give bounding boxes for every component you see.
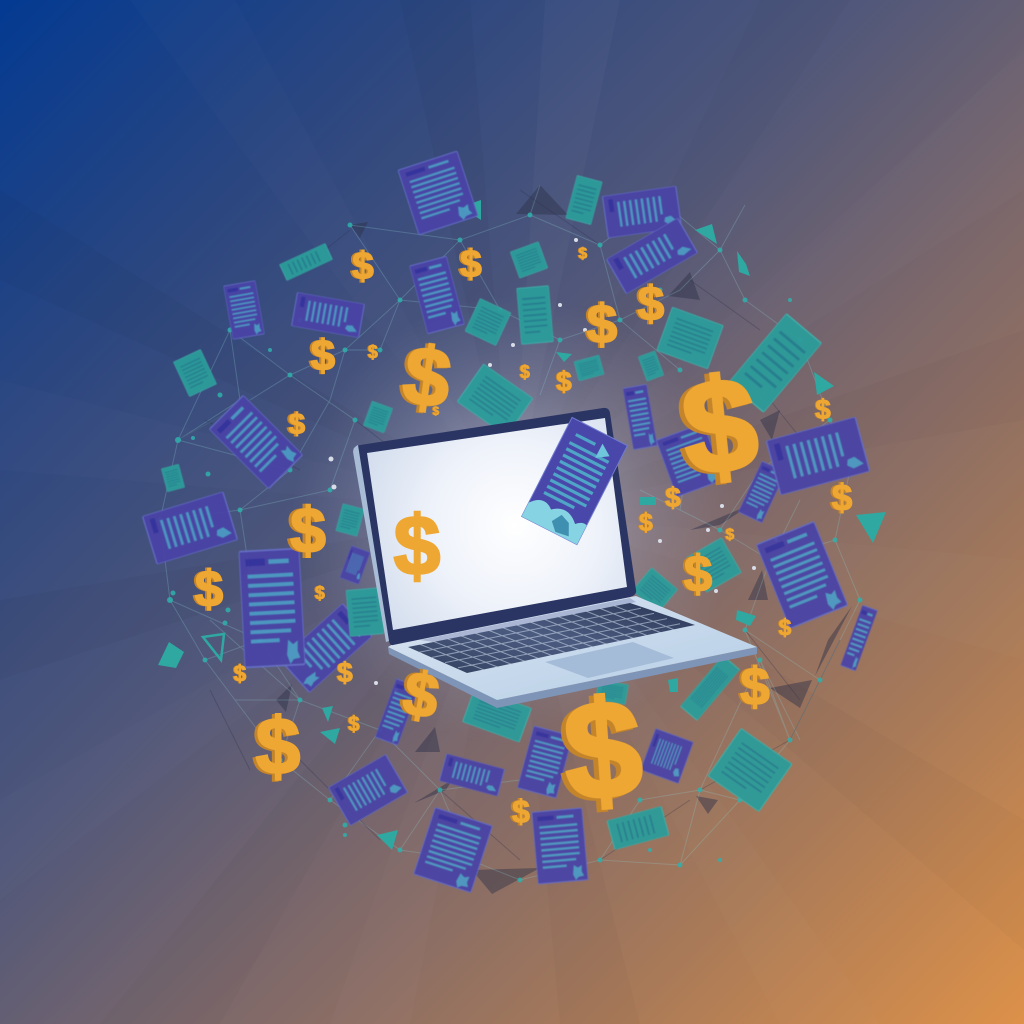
white network nodes xyxy=(328,238,778,692)
icon: dollar sign: $ xyxy=(348,713,360,736)
icon: dollar sign: $ xyxy=(398,328,456,426)
icon: purple document xyxy=(398,151,478,235)
dark network lines xyxy=(178,190,840,860)
icon: purple document xyxy=(239,549,305,667)
icon: dollar sign: $ xyxy=(587,293,617,355)
icon: purple document xyxy=(414,807,492,893)
icon: purple document xyxy=(641,728,693,784)
icon: purple document xyxy=(143,492,237,564)
icon: purple document xyxy=(209,395,303,489)
central glow xyxy=(280,290,750,750)
icon: dollar sign: $ xyxy=(556,366,572,397)
icon: dollar sign: $ xyxy=(639,508,653,536)
icon: purple document xyxy=(224,281,264,339)
icon: teal document xyxy=(336,504,364,536)
icon: purple document xyxy=(340,546,370,584)
icon: purple document xyxy=(756,522,848,628)
icon: teal document xyxy=(566,175,602,225)
icon: dollar sign: $ xyxy=(579,245,588,262)
icon: teal document xyxy=(161,464,185,492)
icon: dollar sign: $ xyxy=(726,526,735,543)
icon: dollar sign: $ xyxy=(352,245,374,288)
icon: teal document xyxy=(638,351,664,381)
icon: dollar sign: $ xyxy=(684,545,712,602)
teal triangles and shards xyxy=(158,200,886,850)
keyboard xyxy=(406,603,695,673)
icon: dollar sign: $ xyxy=(676,349,764,503)
icon: teal document xyxy=(280,243,332,281)
icon: dollar sign: $ xyxy=(638,278,665,331)
icon: purple document xyxy=(410,256,464,334)
icon: teal document xyxy=(363,401,393,433)
icon: teal document xyxy=(657,307,723,369)
icon: teal document xyxy=(728,314,822,412)
icon: teal document xyxy=(510,242,548,278)
laptop base underside xyxy=(388,647,757,708)
lid edge highlight xyxy=(353,445,389,642)
document field behind the laptop xyxy=(143,151,877,893)
icon: dollar sign: $ xyxy=(234,661,247,687)
icon: teal document xyxy=(457,364,533,436)
icon: dollar sign: $ xyxy=(337,657,353,688)
icon: dollar sign: $ xyxy=(665,482,681,513)
icon: teal document xyxy=(517,286,553,344)
network lines xyxy=(160,185,860,880)
icon: purple document xyxy=(292,292,364,338)
document emerging from the screen xyxy=(522,417,627,545)
icon: teal document xyxy=(680,656,740,720)
icon: purple document xyxy=(606,218,698,294)
icon: purple document xyxy=(517,726,573,798)
document text lines xyxy=(544,434,613,512)
icon: dollar sign: $ xyxy=(740,657,770,716)
trackpad xyxy=(545,642,674,678)
laptop xyxy=(353,408,757,708)
document corner mark xyxy=(595,444,613,463)
icon: teal document xyxy=(463,688,531,742)
icon: dollar sign: $ xyxy=(460,243,482,286)
icon: dollar sign: $ xyxy=(559,671,647,830)
icon: purple document xyxy=(375,679,419,745)
icon: dollar sign: $ xyxy=(520,362,530,382)
icon: purple document xyxy=(738,461,786,523)
icon: dollar sign: $ xyxy=(832,477,853,518)
icon: dollar sign: $ xyxy=(779,615,792,641)
document body xyxy=(522,417,627,545)
dollar sign on screen: $ xyxy=(394,499,440,593)
icon: purple document xyxy=(766,417,870,495)
icon: dollar sign: $ xyxy=(289,408,306,441)
network dots xyxy=(158,198,862,882)
icon: purple document xyxy=(841,605,877,671)
icon: dollar sign: $ xyxy=(256,701,300,790)
icon: teal document xyxy=(632,568,678,612)
icon: dollar sign: $ xyxy=(512,794,530,830)
icon: teal document xyxy=(574,355,604,381)
document torn blob xyxy=(548,512,576,538)
icon: purple document xyxy=(656,423,724,497)
dollar signs behind the laptop xyxy=(195,243,853,830)
icon: teal document xyxy=(465,299,511,345)
icon: teal document xyxy=(607,806,669,850)
icon: teal document xyxy=(708,728,792,812)
icon: purple document xyxy=(602,186,682,238)
icon: dollar sign: $ xyxy=(398,659,444,733)
icon: purple document xyxy=(532,808,588,884)
icon: purple document xyxy=(280,604,372,692)
icon: dollar sign: $ xyxy=(195,560,223,617)
icon: teal document xyxy=(595,680,629,704)
icon: teal document xyxy=(346,588,384,636)
document torn teal edge xyxy=(522,494,588,545)
icon: purple document xyxy=(328,754,408,826)
dollar signs in front of the laptop xyxy=(398,659,647,830)
icon: teal document xyxy=(687,538,741,592)
laptop lid xyxy=(353,408,636,645)
icon: purple document xyxy=(623,384,657,450)
laptop base deck xyxy=(388,596,757,700)
icon: dollar sign: $ xyxy=(290,494,326,566)
icon: dollar sign: $ xyxy=(433,404,440,418)
laptop screen xyxy=(367,418,627,630)
icon: dollar sign: $ xyxy=(815,394,831,425)
hinge glow xyxy=(420,598,636,643)
icon: dollar sign: $ xyxy=(315,583,325,603)
dark network facets xyxy=(276,185,852,894)
icon: dollar sign: $ xyxy=(368,342,378,362)
icon: teal document xyxy=(173,349,217,397)
icon: purple document xyxy=(439,754,505,796)
icon: dollar sign: $ xyxy=(311,332,335,381)
